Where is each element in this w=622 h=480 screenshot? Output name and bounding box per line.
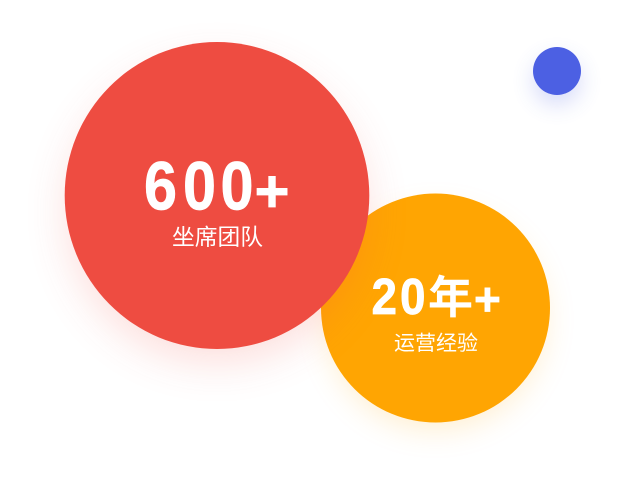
- blue decorative circle: [533, 47, 581, 105]
- stat: 600+: 0: [220, 147, 254, 225]
- orange circle: operating experience: [321, 194, 550, 428]
- stat: 20年+: 年: [428, 261, 473, 326]
- label: 坐席团队: 坐席团队: [172, 225, 263, 250]
- stat: 600+: 6: [144, 147, 177, 225]
- label: 运营经验: 运营经验: [394, 332, 478, 355]
- stat: 20年+: [372, 261, 501, 326]
- stat: 600+: +: [254, 158, 290, 225]
- red circle: agent team: [65, 42, 369, 360]
- stat: 20年+: 0: [400, 269, 426, 326]
- stat: 600+: 0: [183, 147, 216, 225]
- stat: 20年+: +: [474, 273, 501, 325]
- stat: 20年+: 2: [372, 269, 397, 326]
- stat: 600+: [144, 147, 290, 225]
